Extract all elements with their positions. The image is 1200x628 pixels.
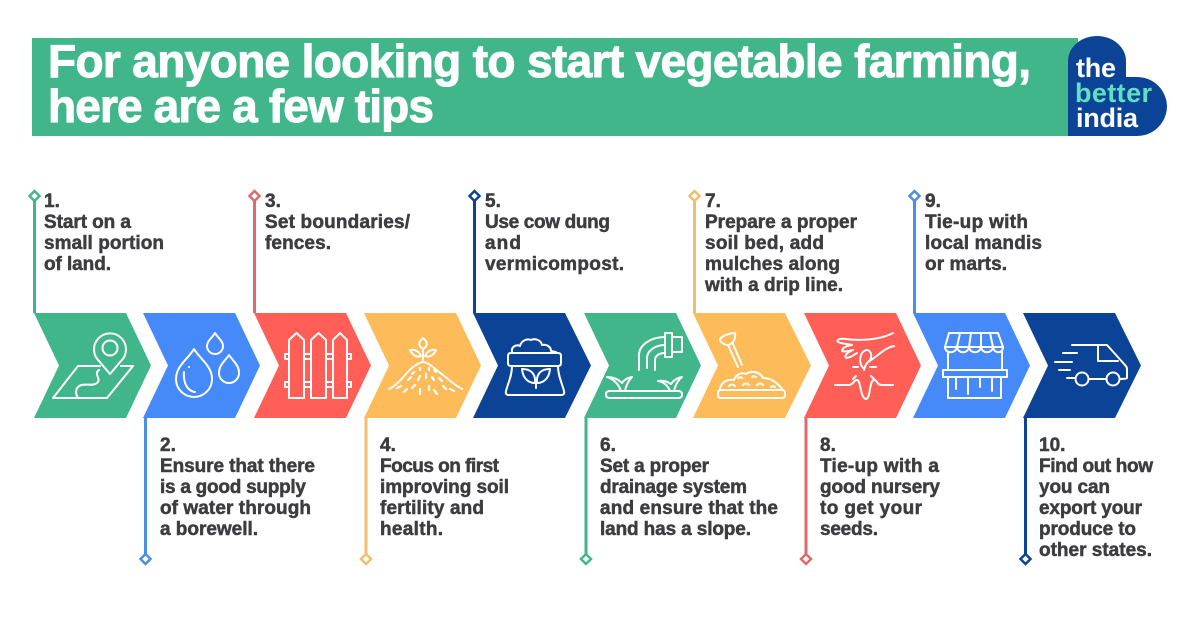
tip 5 bbox=[470, 191, 624, 313]
tip 2: a borewell. bbox=[160, 519, 258, 540]
tip 1: 1. bbox=[44, 191, 60, 212]
tip 4 bbox=[361, 418, 509, 564]
tip 3 bbox=[250, 191, 411, 313]
tip 4: improving soil bbox=[380, 477, 509, 498]
tip 2: Ensure that there bbox=[160, 456, 315, 477]
tip 4: Focus on first bbox=[380, 456, 500, 477]
logo: the better india: better bbox=[1075, 78, 1152, 108]
chevron 6: drainage pipe bbox=[584, 313, 701, 418]
tip 2 bbox=[140, 418, 315, 564]
logo: the better india: the bbox=[1076, 53, 1116, 83]
chevron 3: fence bbox=[254, 313, 371, 418]
tip 1: small portion bbox=[44, 233, 164, 254]
tip 6: drainage system bbox=[600, 477, 747, 498]
tip 7: with a drip line. bbox=[704, 275, 843, 296]
tip 8 bbox=[801, 418, 940, 564]
tip 2: 2. bbox=[160, 435, 176, 456]
tip 1: of land. bbox=[44, 254, 111, 275]
tip 2: is a good supply bbox=[160, 477, 306, 498]
tip 8: to get your bbox=[820, 498, 923, 519]
tip 7: 7. bbox=[705, 191, 721, 212]
tip 4: 4. bbox=[380, 435, 396, 456]
tip 10: Find out how bbox=[1039, 456, 1153, 477]
chevron 10: delivery van bbox=[1023, 313, 1141, 418]
tip 9: local mandis bbox=[925, 233, 1042, 254]
tip 7: mulches along bbox=[705, 254, 840, 275]
tip 5: 5. bbox=[485, 191, 501, 212]
tip 5: and bbox=[485, 233, 521, 254]
tip 10: produce to bbox=[1039, 519, 1136, 540]
tip 6 bbox=[581, 418, 778, 564]
logo: the better india bbox=[1068, 36, 1167, 136]
tip 6: and ensure that the bbox=[600, 498, 778, 519]
tip 8: seeds. bbox=[820, 519, 878, 540]
chevron 7: shovel and soil bbox=[693, 313, 811, 418]
tip 9 bbox=[910, 191, 1042, 313]
tip 3: fences. bbox=[265, 233, 331, 254]
tip 1 bbox=[30, 191, 164, 313]
tip 10: you can bbox=[1039, 477, 1110, 498]
tip 9: 9. bbox=[925, 191, 941, 212]
tip 9: or marts. bbox=[925, 254, 1007, 275]
tip 5: Use cow dung bbox=[485, 212, 610, 233]
tip 6: 6. bbox=[600, 435, 616, 456]
tip 9: Tie-up with bbox=[925, 212, 1028, 233]
tip 8: good nursery bbox=[820, 477, 940, 498]
tip 6: Set a proper bbox=[600, 456, 710, 477]
tip 10: 10. bbox=[1039, 435, 1065, 456]
tip 4: fertility and bbox=[380, 498, 484, 519]
title banner: here are a few tips bbox=[48, 80, 434, 132]
tip 7: Prepare a proper bbox=[705, 212, 858, 233]
tip 5: vermicompost. bbox=[485, 254, 624, 275]
chevron 8: hand planting seed bbox=[804, 313, 921, 418]
tip 7 bbox=[690, 191, 858, 313]
tip 2: of water through bbox=[160, 498, 311, 519]
title banner: For anyone looking to start vegetable farming, bbox=[48, 35, 1031, 87]
chevron 4: plant on soil bbox=[364, 313, 481, 418]
logo: the better india: india bbox=[1076, 103, 1139, 133]
chevron 2: water drops bbox=[143, 313, 260, 418]
tip 4: health. bbox=[380, 519, 443, 540]
chevron 5: compost bag bbox=[473, 313, 591, 418]
tip 6: land has a slope. bbox=[600, 519, 751, 540]
tip 3: 3. bbox=[265, 191, 281, 212]
tip 10 bbox=[1020, 418, 1153, 564]
tip 8: Tie-up with a bbox=[820, 456, 939, 477]
tip 3: Set boundaries/ bbox=[265, 212, 411, 233]
tip 10: other states. bbox=[1039, 540, 1152, 561]
chevron 9: market stall bbox=[913, 313, 1030, 418]
tip 10: export your bbox=[1039, 498, 1143, 519]
chevron 1: map and pin bbox=[34, 313, 151, 418]
tip 8: 8. bbox=[820, 435, 836, 456]
tip 1: Start on a bbox=[44, 212, 131, 233]
title banner bbox=[32, 35, 1078, 136]
tip 7: soil bed, add bbox=[705, 233, 824, 254]
